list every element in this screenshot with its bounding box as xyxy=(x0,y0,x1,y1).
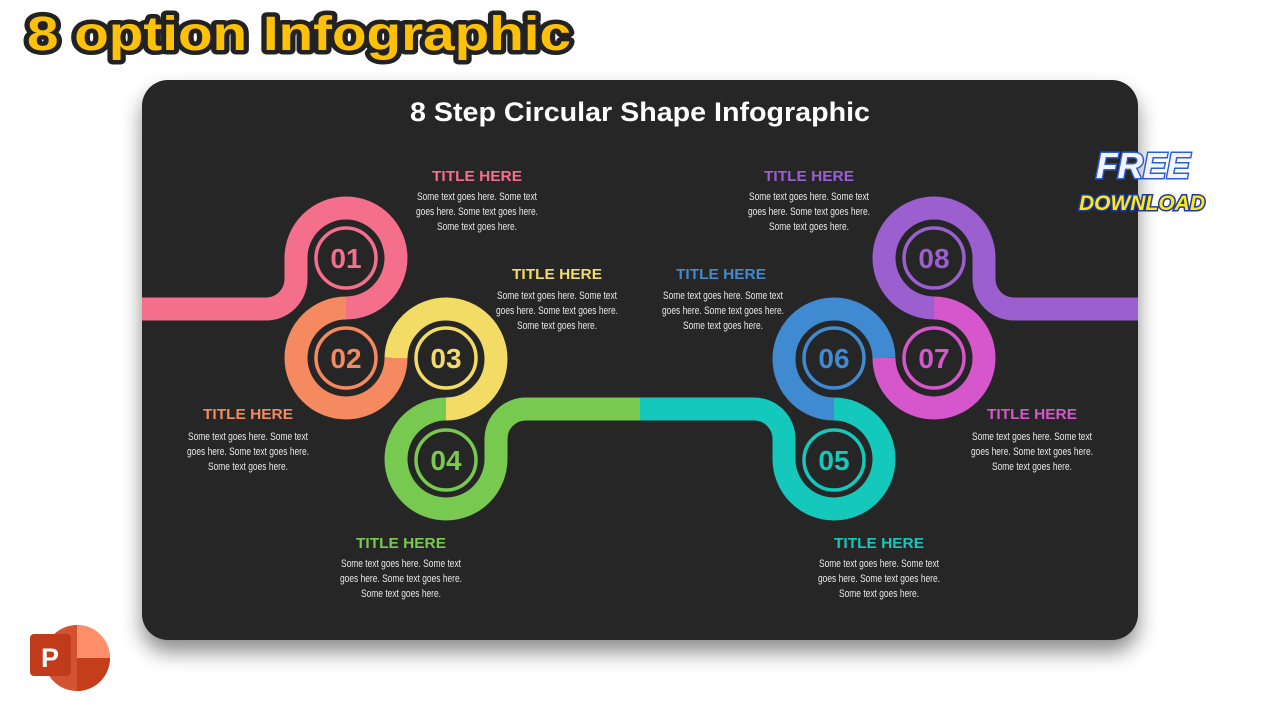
text 03: Some text goes here. Some text xyxy=(497,290,617,302)
text 08 xyxy=(748,168,870,233)
icon: powerpoint xyxy=(30,625,110,691)
badge 03 xyxy=(409,321,483,395)
main title: 8 option Infographic xyxy=(27,8,571,61)
text 01: TITLE HERE xyxy=(432,168,522,185)
badge 06: 06 xyxy=(818,343,850,374)
text 02: Some text goes here. Some text xyxy=(188,431,308,443)
badge 04: 04 xyxy=(430,445,462,476)
text 05: goes here. Some text goes here. xyxy=(818,573,940,585)
text 03: Some text goes here. xyxy=(517,320,597,332)
path: right half xyxy=(640,208,1138,509)
path: left half xyxy=(142,208,641,509)
text 04 xyxy=(340,535,462,600)
text 03 xyxy=(496,266,618,332)
text 02 xyxy=(187,406,309,473)
text 07: Some text goes here. xyxy=(992,461,1072,473)
panel xyxy=(142,80,1138,640)
free download badge: FREE xyxy=(1096,145,1191,186)
text 02: TITLE HERE xyxy=(203,406,293,423)
text 05 xyxy=(818,535,940,600)
icon: powerpoint: P xyxy=(41,643,59,673)
badge 05: 05 xyxy=(818,445,850,476)
text 04: Some text goes here. Some text xyxy=(341,558,461,570)
text 01: goes here. Some text goes here. xyxy=(416,206,538,218)
text 06 xyxy=(662,266,784,332)
text 03: TITLE HERE xyxy=(512,266,602,283)
text 07: goes here. Some text goes here. xyxy=(971,446,1093,458)
text 05: Some text goes here. Some text xyxy=(819,558,939,570)
text 06: Some text goes here. Some text xyxy=(663,290,783,302)
text 08: Some text goes here. Some text xyxy=(749,191,869,203)
text 04: TITLE HERE xyxy=(356,535,446,552)
text 01 xyxy=(416,168,538,233)
badge 07 xyxy=(897,321,971,395)
badge 08 xyxy=(897,221,971,295)
free download badge: DOWNLOAD xyxy=(1079,192,1205,215)
text blocks xyxy=(187,168,1093,600)
panel heading: 8 Step Circular Shape Infographic xyxy=(410,97,870,127)
text 04: Some text goes here. xyxy=(361,588,441,600)
text 06: goes here. Some text goes here. xyxy=(662,305,784,317)
text 06: TITLE HERE xyxy=(676,266,766,283)
text 05: TITLE HERE xyxy=(834,535,924,552)
text 08: TITLE HERE xyxy=(764,168,854,185)
badge 06 xyxy=(797,321,871,395)
badge 03: 03 xyxy=(430,343,462,374)
badge 05 xyxy=(797,423,871,497)
badge 07: 07 xyxy=(918,343,950,374)
text 02: goes here. Some text goes here. xyxy=(187,446,309,458)
free download badge xyxy=(1079,145,1205,215)
badge 01: 01 xyxy=(330,243,362,274)
text 08: goes here. Some text goes here. xyxy=(748,206,870,218)
text 02: Some text goes here. xyxy=(208,461,288,473)
text 07: Some text goes here. Some text xyxy=(972,431,1092,443)
text 04: goes here. Some text goes here. xyxy=(340,573,462,585)
badge 02 xyxy=(309,321,383,395)
text 08: Some text goes here. xyxy=(769,221,849,233)
step badges xyxy=(309,221,971,497)
badge 04 xyxy=(409,423,483,497)
text 05: Some text goes here. xyxy=(839,588,919,600)
text 07 xyxy=(971,406,1093,473)
text 03: goes here. Some text goes here. xyxy=(496,305,618,317)
badge 02: 02 xyxy=(330,343,362,374)
text 07: TITLE HERE xyxy=(987,406,1077,423)
badge 08: 08 xyxy=(918,243,950,274)
text 06: Some text goes here. xyxy=(683,320,763,332)
badge 01 xyxy=(309,221,383,295)
text 01: Some text goes here. Some text xyxy=(417,191,537,203)
text 01: Some text goes here. xyxy=(437,221,517,233)
